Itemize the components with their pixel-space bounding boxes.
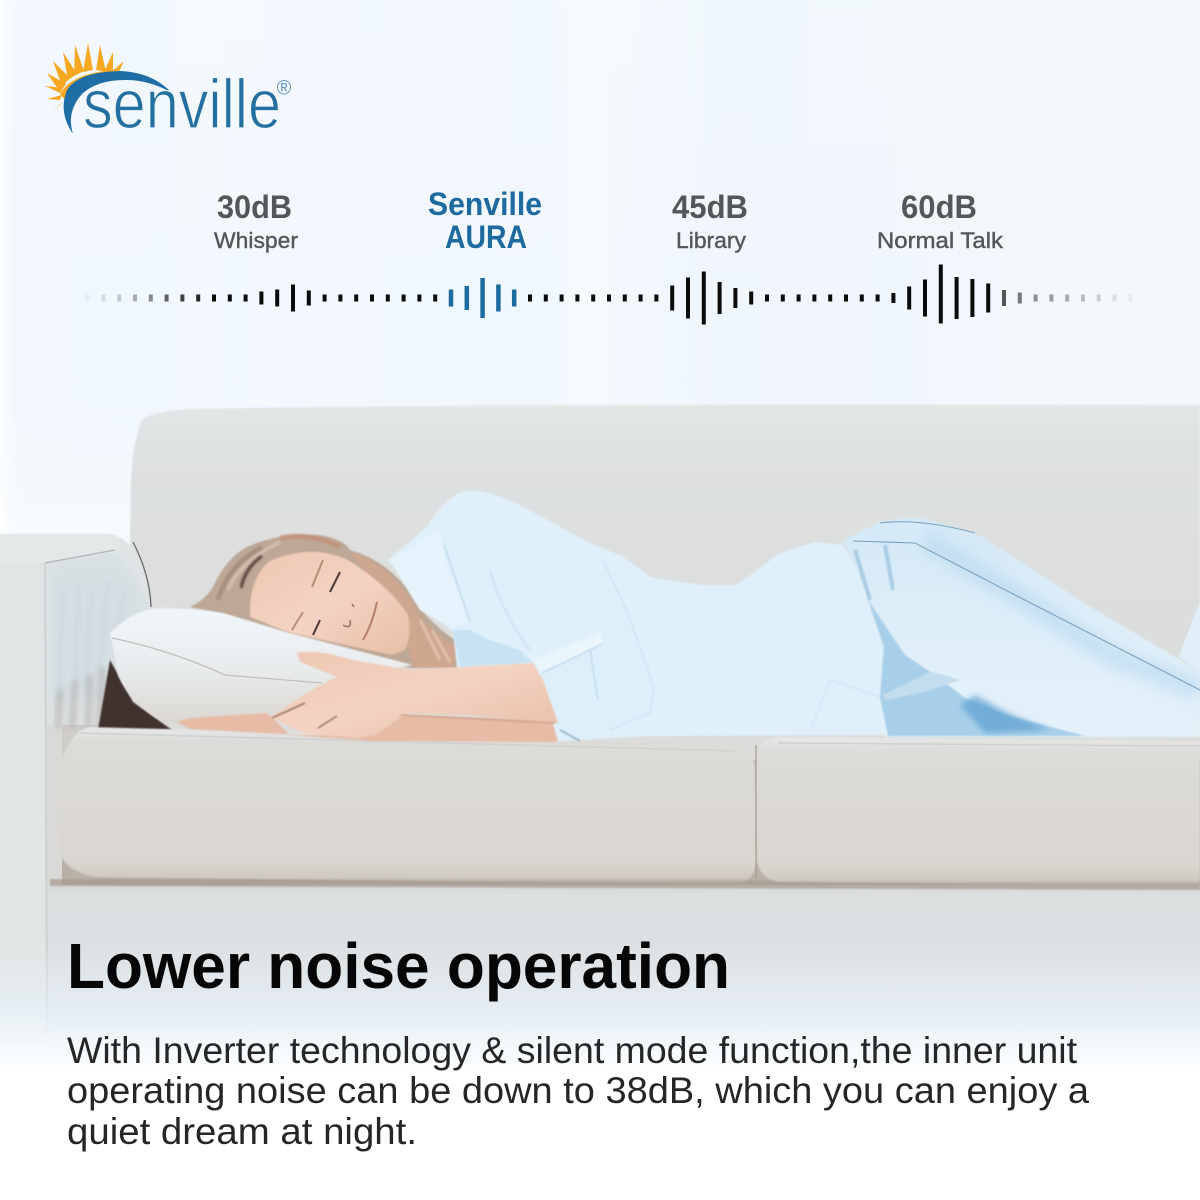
- fading right ticks: [1004, 290, 1130, 306]
- black ticks: middle: [530, 264, 988, 324]
- label: 30dB whisper: 30dB: [217, 189, 292, 225]
- label: Senville AURA: [428, 186, 542, 255]
- blue ticks: Senville AURA: [451, 278, 514, 318]
- jeans dark fold: [868, 600, 1085, 736]
- jeans mottled seam: [925, 540, 1200, 690]
- lower arm: [177, 713, 557, 742]
- label: 45dB library: Library: [676, 228, 746, 253]
- jeans: [843, 518, 1200, 737]
- bottom fade to white: [0, 945, 1200, 1075]
- body text: [67, 1030, 1089, 1152]
- black ticks: [214, 284, 435, 312]
- body text: operating noise can be down to 38dB, which you can enjoy a: [67, 1070, 1089, 1111]
- body text: quiet dream at night.: [67, 1111, 417, 1152]
- sofa: [0, 404, 1200, 1090]
- heading: Lower noise operation: [67, 930, 730, 1002]
- dark gap under armrest: [98, 660, 172, 730]
- hair: [190, 535, 462, 668]
- body text: With Inverter technology & silent mode function,the inner unit: [67, 1030, 1078, 1071]
- label: 45dB library: [672, 189, 748, 253]
- label: 60dB normal talk: 60dB: [901, 189, 977, 225]
- sofa armrest: [0, 534, 1200, 1040]
- label: 60dB normal talk: [877, 189, 1004, 253]
- sofa seat shadow: [50, 879, 1200, 890]
- shirt: [388, 490, 889, 741]
- label: 30dB whisper: [214, 189, 298, 253]
- woman sleeping: [110, 490, 1200, 742]
- sofa base: [0, 875, 1200, 1090]
- sound wave scale: [88, 264, 1130, 324]
- label: 30dB whisper: Whisper: [214, 228, 298, 253]
- sofa backrest: [130, 404, 1200, 760]
- left seat cushion: [58, 727, 757, 884]
- fading left ticks: [88, 294, 198, 302]
- label: Senville AURA: Senville: [428, 186, 542, 222]
- pillow: [110, 608, 413, 724]
- icon: blue swoosh: [64, 71, 172, 134]
- label: Senville AURA: AURA: [445, 219, 527, 255]
- icon: sun rays: [45, 43, 124, 112]
- label: 60dB normal talk: Normal Talk: [877, 228, 1004, 253]
- noise level labels: [214, 186, 1004, 255]
- label: 45dB library: 45dB: [672, 189, 748, 225]
- right seat cushion: [755, 737, 1200, 886]
- rolled sleeve: [533, 558, 654, 741]
- logo: Senville: [45, 43, 292, 143]
- logo wordmark: senville: [83, 65, 281, 143]
- registered mark: ®: [277, 77, 292, 99]
- face: [250, 552, 409, 655]
- arm and hand: [270, 652, 558, 738]
